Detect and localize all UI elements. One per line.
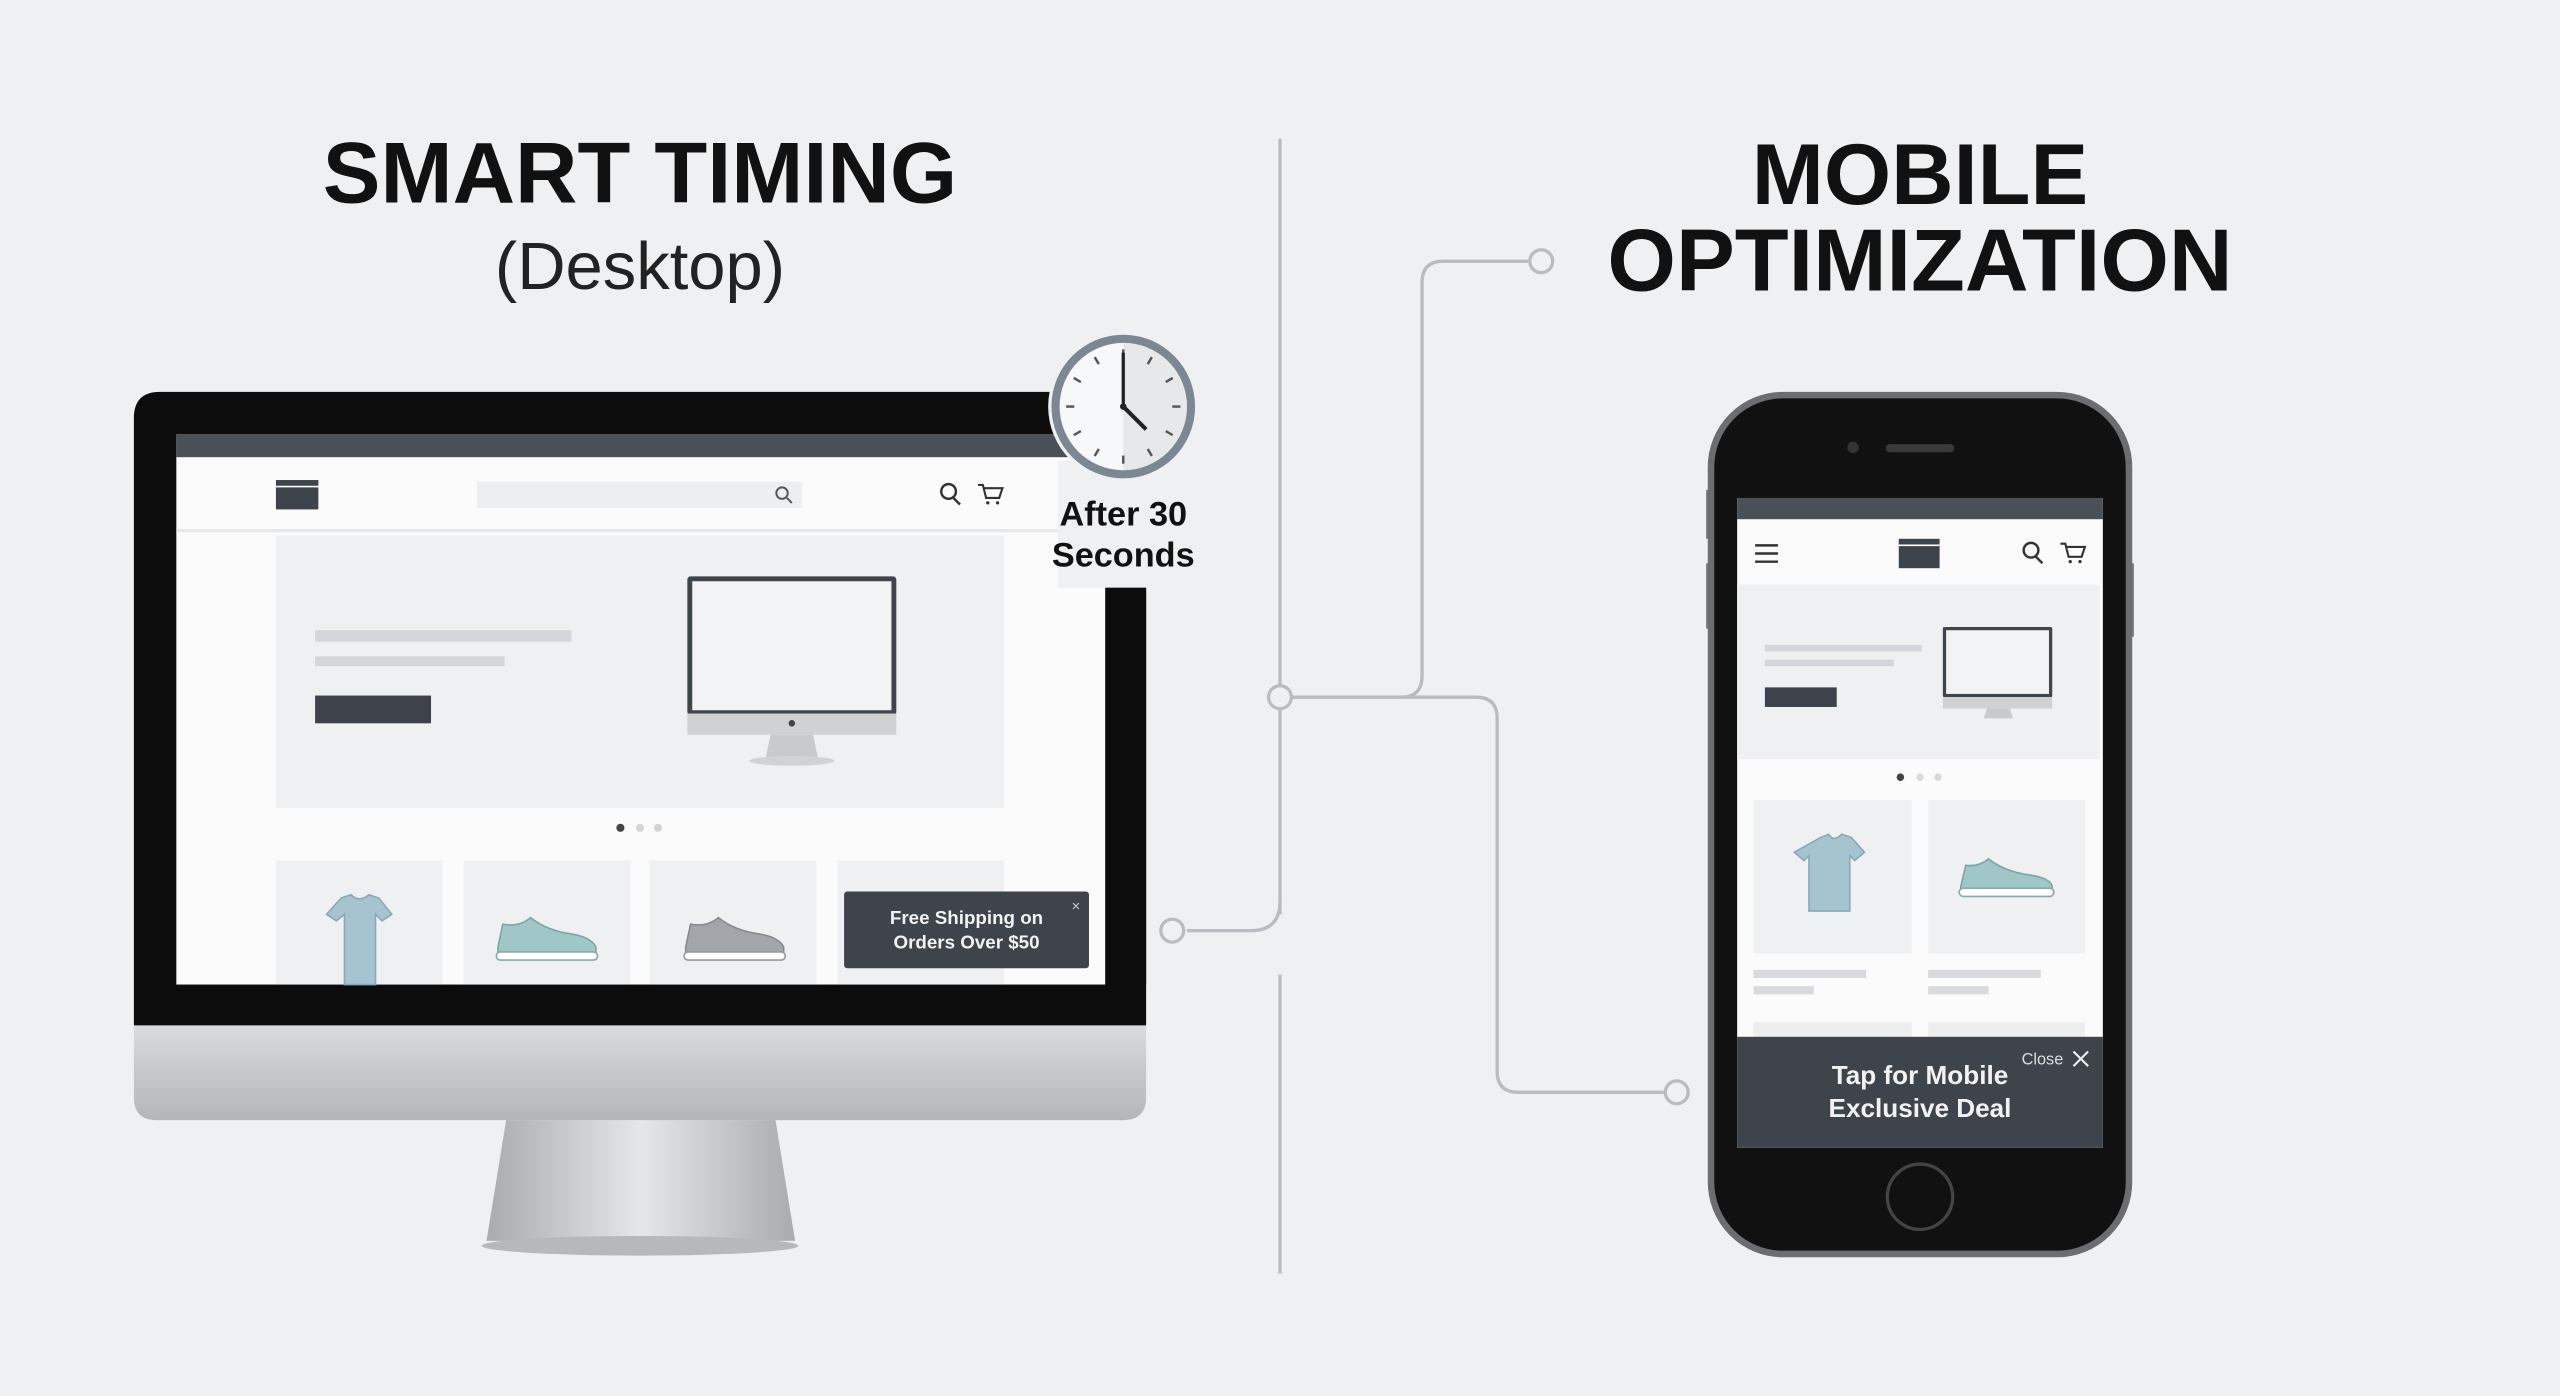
popup: mobile deal [1737,1037,2103,1148]
popup: free shipping: Orders Over $50 [894,932,1040,953]
icon: clock [1048,331,1198,482]
phone screen [1737,498,2103,1148]
popup: mobile deal: Close [2022,1051,2063,1069]
phone hero [1737,585,2100,759]
connector lines [1161,139,1688,1274]
title: mobile optimization [1607,127,2233,310]
title: smart timing: SMART TIMING [323,125,957,221]
popup: free shipping: × [1072,899,1080,915]
screen: website [176,434,1105,985]
label: after 30 seconds: Seconds [1052,537,1195,575]
popup: mobile deal: Exclusive Deal [1829,1093,2011,1123]
label: after 30 seconds: After 30 [1059,496,1187,534]
product tiles [276,860,1004,985]
phone products [1753,800,2085,1037]
mobile phone [1706,395,2134,1254]
hero banner [276,536,1004,808]
label: after 30 seconds [1052,496,1195,575]
title: mobile optimization: MOBILE [1752,127,2088,223]
title: smart timing: (Desktop) [495,229,785,304]
title: smart timing [323,125,957,304]
popup: free shipping: Free Shipping on [890,907,1043,928]
title: mobile optimization: OPTIMIZATION [1607,211,2233,310]
popup: free shipping [844,891,1089,968]
desktop monitor [134,392,1208,1256]
popup: mobile deal: Tap for Mobile [1832,1060,2008,1090]
